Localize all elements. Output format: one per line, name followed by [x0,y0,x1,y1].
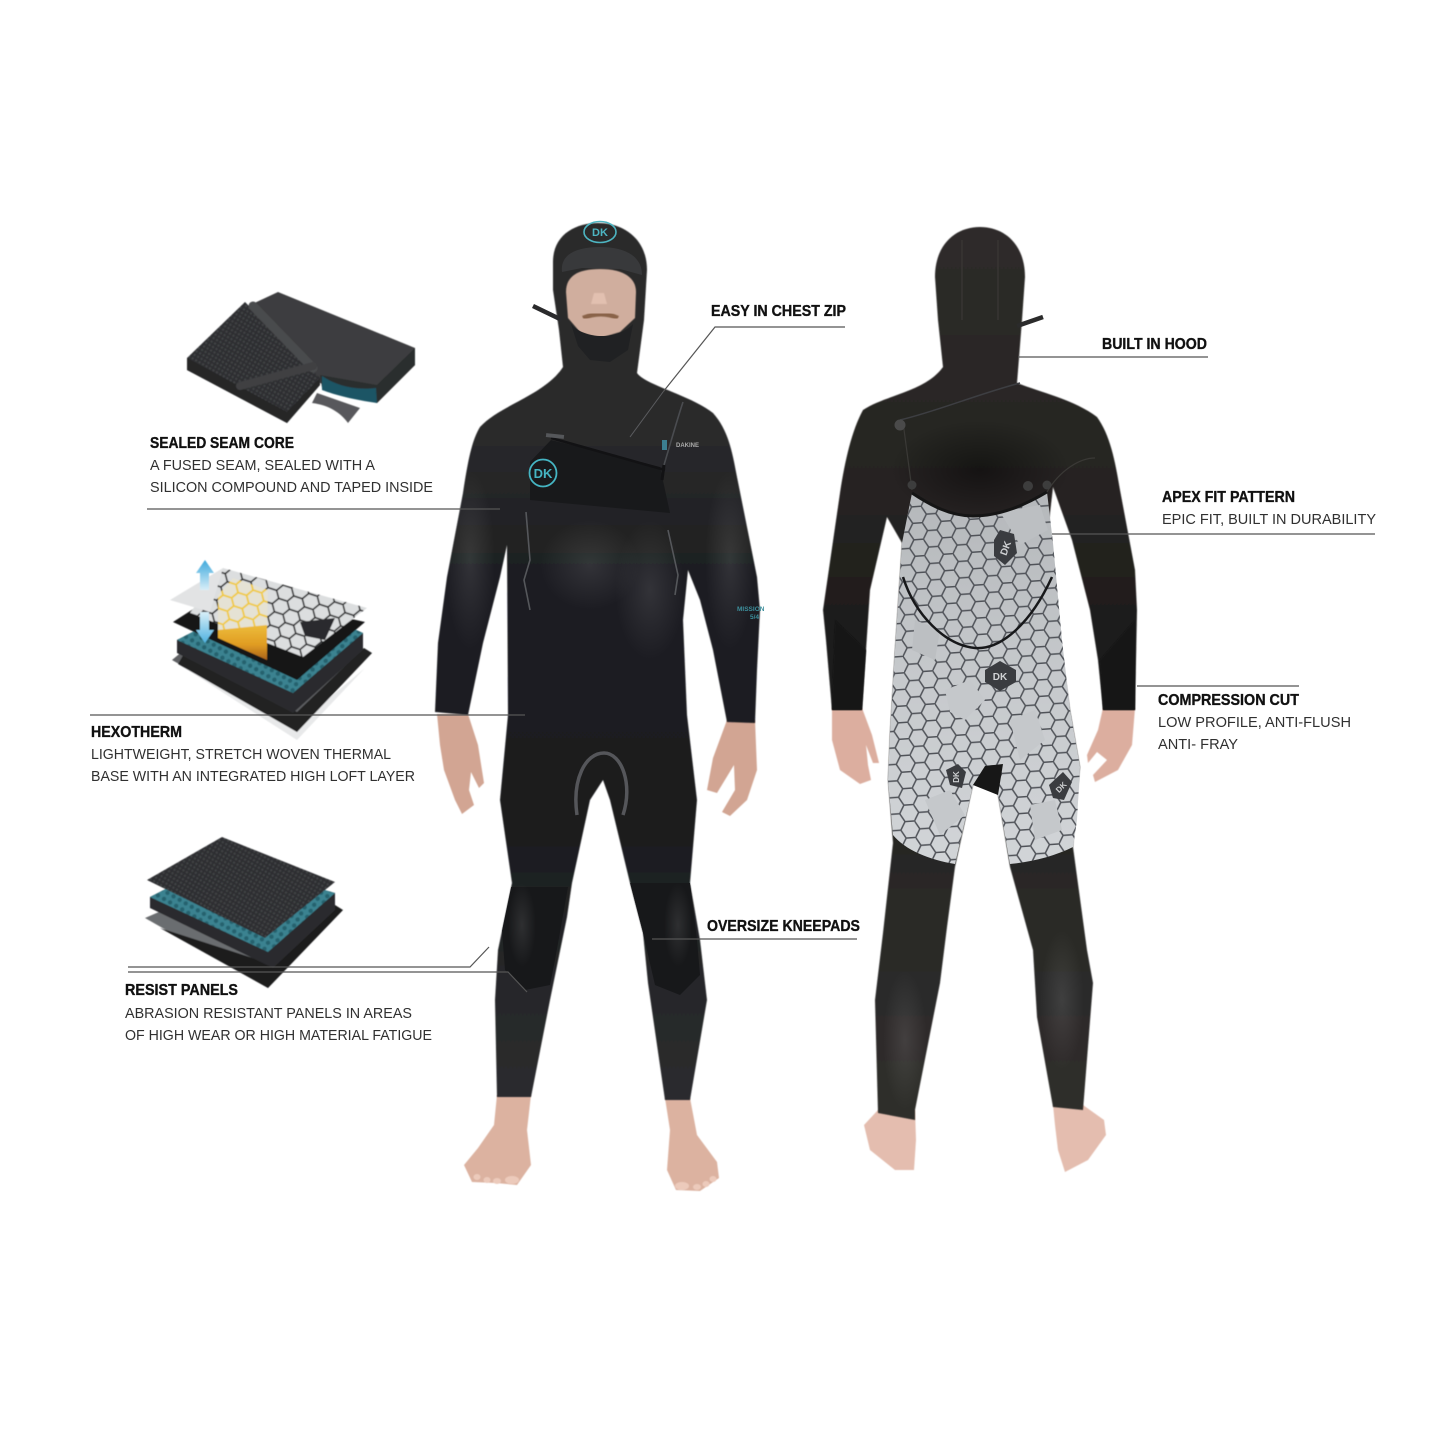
resist panels illustration [145,837,343,988]
hexagon back panel [888,493,1080,864]
crotch gusset [973,764,1003,795]
callout: easy in chest zip: EASY IN CHEST ZIP [711,303,846,320]
sleeve text [737,606,765,621]
back seams [894,383,1095,648]
back suit upper and legs [823,227,1137,1120]
callout: compression cut [1137,686,1351,753]
left foam block [187,302,320,423]
plain hexagon patches [912,505,1062,840]
back hood toggle [1017,317,1043,326]
back suit highlights [832,240,1135,1110]
front wetsuit figure [435,222,765,1191]
top textured layer [147,837,335,938]
white hexagon top [190,568,367,657]
hood toggle [533,306,562,320]
panel logos: DK [999,539,1014,557]
callout: sealed seam core: SEALED SEAM CORE [150,435,294,452]
callout: compression cut: COMPRESSION CUT [1158,692,1299,709]
middle foam layer [150,860,335,968]
callout: sealed seam core [147,435,500,509]
callout: compression cut: LOW PROFILE, ANTI-FLUSH [1158,714,1351,731]
callout: sealed seam core: SILICON COMPOUND AND TAPED INSIDE [150,479,433,496]
bottom hexagon fabric [180,665,365,740]
callout: resist panels [125,947,527,1044]
bottom layer [145,905,343,988]
sleeve text: MISSION [737,606,765,613]
callout: resist panels: RESIST PANELS [125,982,238,999]
panel logos: DK [952,771,961,783]
callout: resist panels: OF HIGH WEAR OR HIGH MATERIAL FATIGUE [125,1027,432,1044]
panel logos: DK [1054,780,1069,795]
side seams [524,512,678,610]
teal edge [322,376,377,403]
panel logos: DK [993,672,1008,683]
back wetsuit figure [823,227,1137,1172]
callout: hexotherm: BASE WITH AN INTEGRATED HIGH LOFT LAYER [91,768,415,785]
teal mesh [177,592,363,693]
chest logo: DK [534,466,553,481]
callout: apex fit pattern: APEX FIT PATTERN [1162,489,1295,506]
panel logos [952,539,1069,795]
black layer [173,590,365,680]
front suit shading [454,504,746,995]
callout: compression cut: ANTI- FRAY [1158,736,1238,753]
dark foam layer [177,592,363,713]
hood logo [584,222,616,242]
chest logo [530,460,556,486]
hexotherm illustration [170,560,372,740]
sleeve text: 5/4 [750,614,759,621]
callout: apex fit pattern: EPIC FIT, BUILT IN DURABILITY [1162,511,1376,528]
chest zip panel [530,402,699,513]
front suit body [435,223,760,1100]
dark logo hexagons [946,530,1072,800]
sealed seam illustration [187,292,415,423]
callout: apex fit pattern [1052,489,1376,534]
right foam block [250,292,415,403]
skin: back hands and feet [832,708,1135,1172]
hood visor and face [562,247,642,362]
skin: front hands and feet [437,714,757,1191]
hood logo: DK [592,227,608,239]
callout: oversize kneepads: OVERSIZE KNEEPADS [707,918,860,935]
crotch seam [576,753,627,815]
seam tape strip [253,306,313,368]
blue arrows [196,560,214,590]
teal mesh [150,860,335,952]
callout: built in hood: BUILT IN HOOD [1102,336,1207,353]
callout: sealed seam core: A FUSED SEAM, SEALED WITH A [150,457,375,474]
yellow heat zone [218,622,267,660]
callout: easy in chest zip [630,303,846,437]
grey base layer [172,645,372,732]
tape [312,393,360,423]
callout: resist panels: ABRASION RESISTANT PANELS IN AREAS [125,1005,412,1022]
chest zip panel: DAKINE [676,443,699,449]
dark logo patch [300,618,335,640]
callout: hexotherm [90,715,525,785]
callout: hexotherm: HEXOTHERM [91,724,182,741]
callout: hexotherm: LIGHTWEIGHT, STRETCH WOVEN THERMAL [91,746,391,763]
